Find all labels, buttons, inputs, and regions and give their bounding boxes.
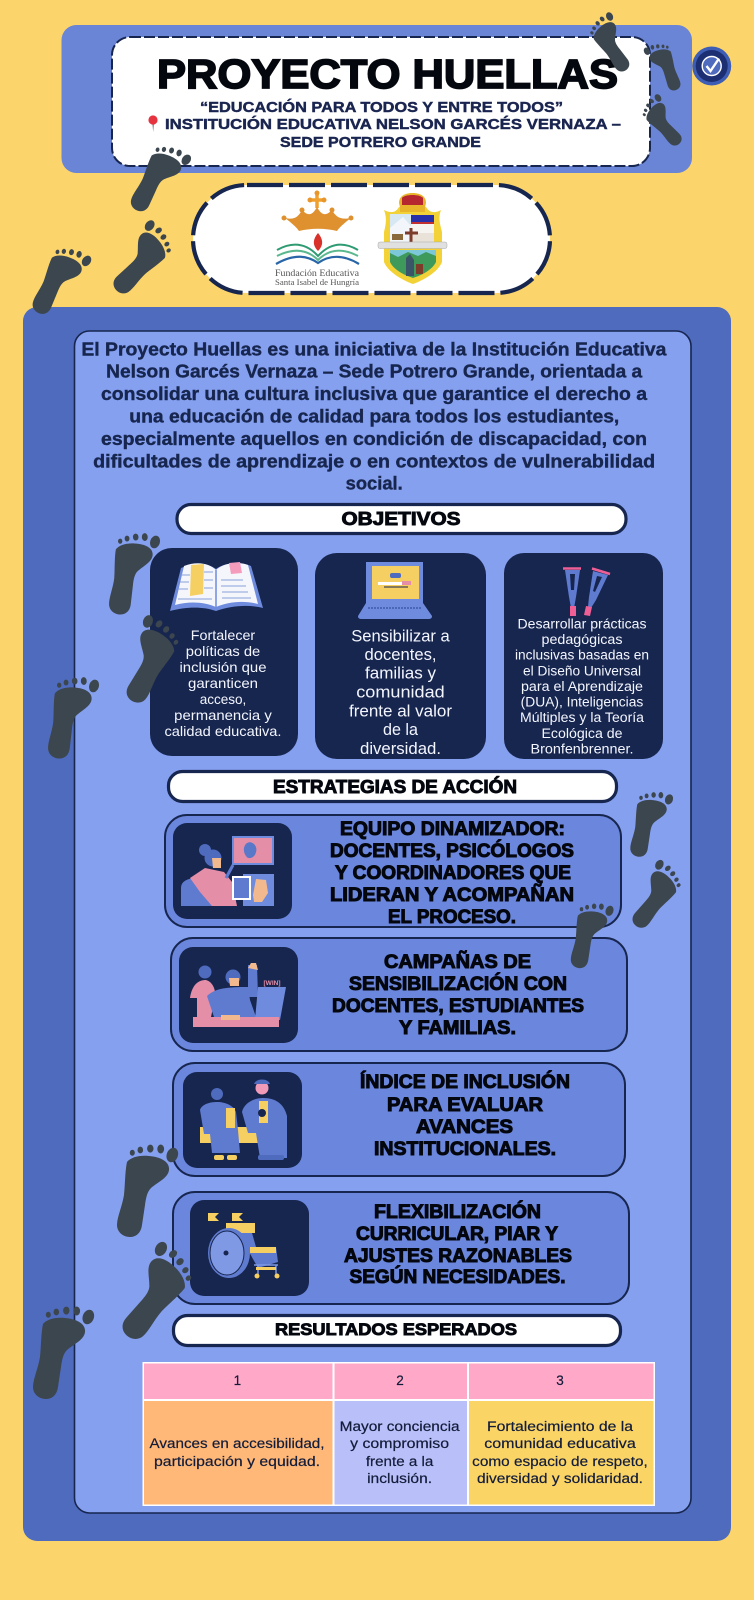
text: ÍNDICE DE INCLUSIÓN [360,1071,570,1093]
icon: location pin [148,115,158,132]
text [344,1201,572,1288]
resultado 2: Mayor conciencia [340,1419,460,1434]
logo: Fundación Educativa: Santa Isabel de Hungría [275,277,359,287]
icons: footprints [31,9,696,1399]
intro text: especialmente aquellos en condición de discapacidad, con [101,429,647,449]
text: CAMPAÑAS DE [384,951,531,973]
footprint: objetivos middle [97,610,191,707]
resultado 3: Fortalecimiento de la [487,1419,634,1434]
icon: crutches [563,568,610,616]
footprint: lower left bottom [33,1306,96,1399]
text: SENSIBILIZACIÓN CON [349,973,567,995]
resultado 1 [150,1436,324,1469]
text: FLEXIBILIZACIÓN [374,1201,541,1223]
text: AVANCES [416,1117,513,1138]
subtitle: “EDUCACIÓN PARA TODOS Y ENTRE TODOS” [200,98,563,116]
text: Y COORDINADORES QUE [335,863,571,884]
heading: objetivos [177,504,626,534]
footprint: far left [31,243,94,323]
text: AJUSTES RAZONABLES [344,1246,572,1267]
panel: objetivo 1 [150,548,298,756]
text: Sensibilizar a [351,627,450,646]
panel: índice de inclusión [173,1063,625,1176]
resultado 3: como espacio de respeto, [472,1454,648,1469]
title: PROYECTO HUELLAS [157,51,618,97]
footprint: header top [582,9,648,75]
column headers: 3 [556,1373,564,1388]
footprint: lower left middle [93,1236,205,1344]
text: garanticen [188,675,258,691]
text: inclusión que [180,659,267,675]
footprint: over box two [571,903,615,968]
intro text [81,340,667,494]
column headers [234,1373,564,1388]
icon: open book [170,562,263,611]
subtitle: INSTITUCIÓN EDUCATIVA NELSON GARCÉS VERNAZA – [165,115,621,133]
text: Desarrollar prácticas [518,616,647,632]
text: diversidad. [360,739,441,758]
text: Múltiples y la Teoría [520,710,645,725]
footprint: beside logos [93,216,181,297]
text: EQUIPO DINAMIZADOR: [340,819,565,840]
column headers: 2 [396,1373,404,1388]
text [164,627,282,739]
footprint: objetivos left [46,677,103,759]
panel: objetivo 2 [315,553,486,759]
icon: teacher at tablet [173,823,292,919]
text: EL PROCESO. [388,907,516,928]
panel: equipo dinamizador [165,815,621,928]
footprint: lower left top [117,1144,180,1237]
text: Ecológica de [542,726,622,741]
footprint: below header [129,141,194,221]
text: Bronfenbrenner. [530,742,634,756]
text: inclusivas basadas en [515,648,649,662]
title card [112,37,650,166]
column headers: 1 [234,1373,241,1388]
heading: resultados esperados [174,1316,620,1346]
text: permanencia y [174,707,272,723]
intro text: social. [346,474,403,494]
text: Fortalecer [191,627,256,643]
resultado 2: inclusión. [367,1471,432,1486]
text: calidad educativa. [164,723,282,739]
panel: inner [74,331,691,1513]
footprint: objetivos top [107,533,164,615]
text: SEGÚN NECESIDADES. [350,1266,566,1288]
text: docentes, [364,645,436,664]
heading: estrategias [168,772,616,802]
panel: flexibilización [173,1192,629,1304]
text: familias y [365,664,436,682]
heading: resultados esperados: RESULTADOS ESPERADOS [275,1320,517,1339]
logo: school shield [378,193,447,284]
text [330,819,574,928]
intro text: una educación de calidad para todos los estudiantes, [129,406,619,426]
text: de la [383,720,419,739]
table: resultados [142,1362,655,1506]
text [349,627,452,758]
resultado 2 [340,1419,460,1486]
resultado 3 [472,1419,648,1486]
panel: main [23,307,731,1541]
text: políticas de [186,643,260,659]
intro text: consolidar una cultura inclusiva que garantice el derecho a [101,384,648,404]
intro text: dificultades de aprendizaje o en contextos de vulnerabilidad [93,451,655,471]
intro text: Nelson Garcés Vernaza – Sede Potrero Grande, orientada a [106,362,643,382]
panel: header [62,25,692,173]
icon: laptop [358,562,432,619]
text: comunidad [356,682,445,702]
text: (DUA), Inteligencias [521,694,644,710]
text: PARA EVALUAR [387,1095,543,1116]
text: CURRICULAR, PIAR Y [356,1224,558,1245]
intro text: El Proyecto Huellas es una iniciativa de la Institución Educativa [81,340,667,360]
text [332,951,584,1039]
footprint: header lower right [636,91,696,148]
text: para el Aprendizaje [521,679,643,694]
footprint: strategies right [612,856,690,931]
resultado 2: y compromiso [350,1436,449,1451]
text: DOCENTES, PSICÓLOGOS [330,840,574,862]
logo: Fundación Educativa [275,190,359,287]
icon: check badge [692,46,731,86]
text: Y FAMILIAS. [399,1018,516,1039]
subtitle: SEDE POTRERO GRANDE [280,135,481,151]
icon: wheelchair [190,1200,309,1296]
text: acceso, [200,691,246,707]
icon: people at computer: [WIN] [264,980,280,987]
panel: campañas [171,938,627,1051]
text: frente al valor [349,702,452,720]
text: el Diseño Universal [523,664,641,678]
resultado 1: participación y equidad. [154,1454,320,1469]
subtitle [165,98,621,151]
panel: objetivo 3 [504,553,663,759]
heading: estrategias: ESTRATEGIAS DE ACCIÓN [273,776,517,797]
text: INSTITUCIONALES. [374,1139,556,1160]
logo: Fundación Educativa: Fundación Educativa [275,268,359,278]
panel: logos [193,185,550,293]
resultado 3: comunidad educativa [484,1436,636,1451]
text: LIDERAN Y ACOMPAÑAN [330,884,574,906]
text [515,616,649,756]
icon: people at computer [179,947,298,1043]
resultado 3: diversidad y solidaridad. [477,1471,643,1486]
footprint: strategies upper right [630,792,674,857]
resultado 1: Avances en accesibilidad, [150,1436,324,1451]
text [360,1071,570,1160]
heading: objetivos: OBJETIVOS [342,509,460,529]
icon: seated people [183,1072,302,1168]
footprint: header right [642,42,681,94]
text: pedagógicas [542,632,623,647]
text: DOCENTES, ESTUDIANTES [332,996,584,1017]
resultado 2: frente a la [366,1454,434,1469]
